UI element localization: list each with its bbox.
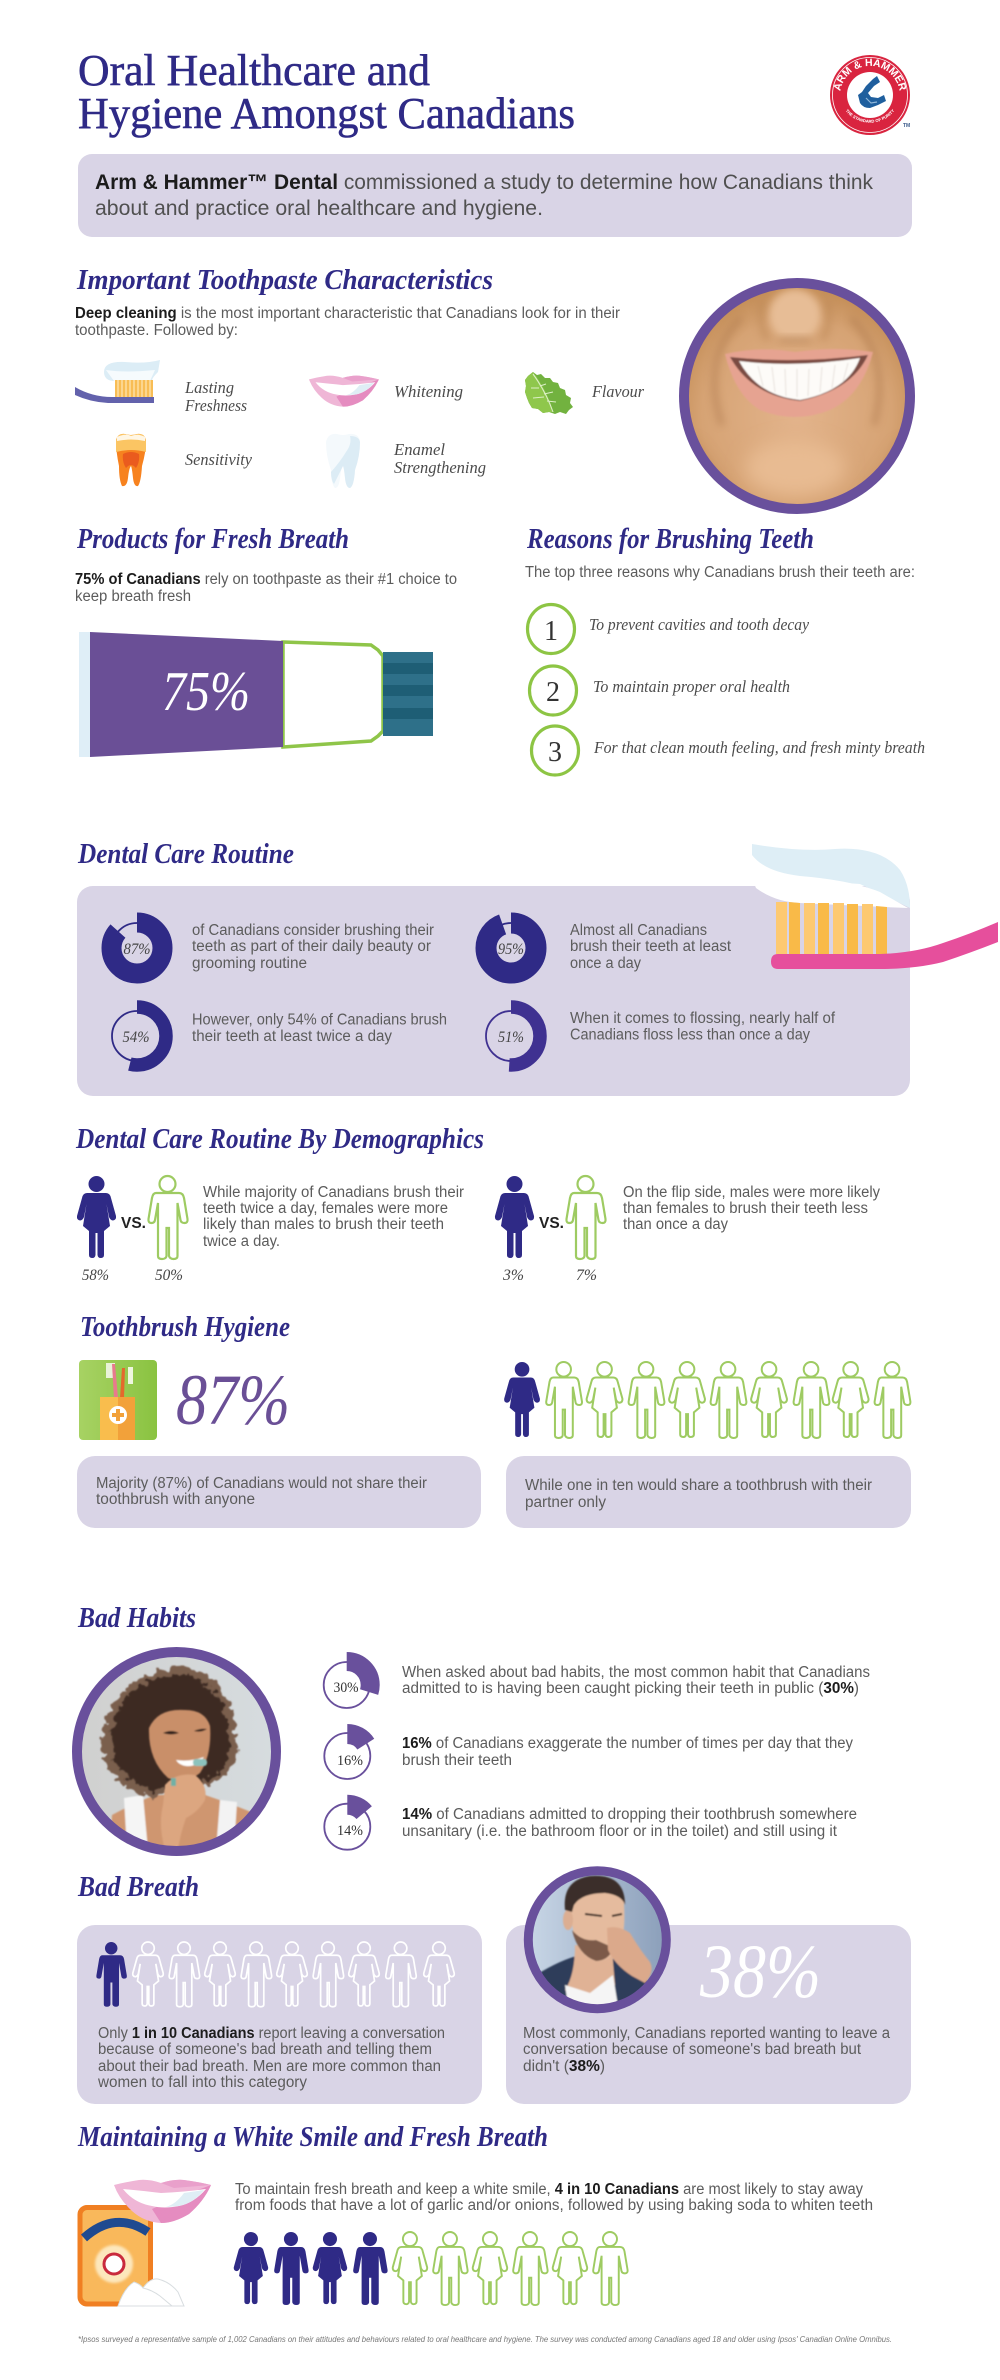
label: lasting freshness: Freshness [184,396,247,415]
text: 95%: once a day [570,955,641,972]
label: lasting freshness [184,378,247,415]
panel: would not share [77,1456,481,1528]
reason 2 [530,666,790,715]
panel: 38%: Most commonly, Canadians reported wanting to leave a [523,2025,890,2042]
panel: intro [78,154,912,237]
panel: would not share: toothbrush with anyone [96,1491,255,1508]
donut: 54%: 54% [122,1029,150,1046]
pie: 16% [324,1733,370,1779]
panel: 1 in 10 canadians [77,1925,482,2104]
panel: 38% [506,1925,911,2104]
label: flavour: Flavour [591,382,644,401]
pie: 30% [323,1662,370,1708]
donut: 51% [482,1007,540,1065]
pie: 16%: 16% [337,1753,363,1769]
text: garlic and baking soda: To maintain fresh breath and keep a white smile, 4 in 10 Canadians are most likely to stay away [235,2181,863,2198]
text: females brush more: likely than males to brush their teeth [203,1216,444,1233]
panel: would share with partner: While one in ten would share a toothbrush with their [525,1477,872,1494]
label: enamel strengthening: Enamel [393,440,445,459]
text: males flip side: On the flip side, males were more likely [623,1184,880,1201]
photo: smile [680,283,915,510]
icon: baking soda box with lips [80,2180,211,2306]
reason 3: 3 [548,737,562,768]
text: garlic and baking soda [235,2181,873,2214]
text: garlic and baking soda: from foods that have a lot of garlic and/or onions, followed by using baking soda to whiten teeth [235,2197,873,2214]
text block: 75% of canadians: keep breath fresh [75,588,191,605]
text: exaggerate [402,1735,853,1769]
text block: 75% of canadians: 75% of Canadians rely on toothpaste as their #1 choice to [75,571,457,588]
donut: 54% [108,1007,166,1065]
text: exaggerate: brush their teeth [402,1752,512,1769]
panel: 1 in 10 canadians: about their bad breath. Men are more common than [98,2058,441,2075]
text block: top three reasons: The top three reasons why Canadians brush their teeth are: [525,564,915,581]
logo: Arm & Hammer: ARM & HAMMER [834,58,906,91]
heading: toothbrush hygiene: Toothbrush Hygiene [80,1312,290,1343]
text: 51% [570,1010,836,1044]
panel: 1 in 10 canadians: women to fall into this category [97,2074,307,2091]
text: dropping toothbrush: unsanitary (i.e. the bathroom floor or in the toilet) and still using it [402,1823,838,1840]
reason 2: To maintain proper oral health [593,677,790,696]
section: bad habits [77,1603,870,1855]
donut: 87% [112,922,162,974]
photo: man holding nose [528,1871,666,2010]
title [78,46,575,138]
panel: intro: Arm & Hammer™ Dental commissioned a study to determine how Canadians think [95,171,873,194]
text: females brush more: twice a day. [203,1233,280,1250]
panel: dental care routine [77,886,910,1096]
reason 1: To prevent cavities and tooth decay [589,615,809,634]
comparison: 3% vs 7%: 3% [502,1267,524,1284]
section: reasons for brushing teeth [525,524,925,775]
panel: intro: about and practice oral healthcare and hygiene. [95,197,543,220]
text: 95%: Almost all Canadians [570,922,707,939]
text: exaggerate: 16% of Canadians exaggerate the number of times per day that they [402,1735,853,1752]
icon: pale tooth, enamel strengthening [326,434,360,488]
comparison: 3% vs 7% [495,1176,606,1284]
logo: Arm & Hammer [830,55,910,135]
reason 3 [532,726,925,775]
label: 75%: 75% [162,661,250,723]
heading: demographics: Dental Care Routine By Demographics [75,1124,484,1155]
label: sensitivity: Sensitivity [185,450,252,469]
icon: orange tooth, sensitivity [116,434,146,486]
section: maintaining a white smile [77,2122,873,2306]
text: 54%: However, only 54% of Canadians brush [192,1012,447,1028]
panel: 38%: didn't (38%) [523,2058,605,2075]
comparison: 58% vs 50%: VS. [121,1215,146,1232]
text: picking teeth: admitted to is having been caught picking their teeth in public (30%) [402,1680,859,1697]
panel: would share with partner [506,1456,911,1528]
text: dropping toothbrush [402,1806,857,1840]
footnote: *Ipsos surveyed a representative sample of 1,002 Canadians on their attitudes and behaviours related to oral healthcare and hygiene. The survey was conducted among Canadians aged 18 and older using Ipsos' Canadian Online Omnibus. [78,2334,892,2344]
icon: large toothbrush [752,844,998,969]
icon: toothpaste tube 75% [79,632,433,757]
panel: would not share: Majority (87%) of Canadians would not share their [96,1475,427,1492]
label: enamel strengthening: Strengthening [394,458,486,477]
donut: 95%: 95% [498,941,524,958]
text: males flip side [623,1184,880,1233]
label: whitening: Whitening [394,382,463,401]
comparison: 58% vs 50% [77,1176,188,1284]
text: males flip side: than once a day [623,1216,728,1233]
text block: deep cleaning: toothpaste. Followed by: [75,322,238,339]
heading: bad breath: Bad Breath [77,1872,199,1903]
photo: woman brushing teeth [77,1652,276,1855]
text: females brush more: While majority of Canadians brush their [203,1184,464,1201]
panel: 1 in 10 canadians: because of someone's bad breath and telling them [98,2041,432,2058]
section: dental care routine by demographics [75,1124,880,1284]
text: 87% [192,922,434,972]
panel: 1 in 10 canadians: Only 1 in 10 Canadians report leaving a conversation [98,2025,445,2042]
text: 95% [570,922,732,972]
pictogram: one in ten [504,1362,910,1438]
heading: products: Products for Fresh Breath [76,524,349,555]
title: Oral Healthcare and [78,46,430,95]
text block: deep cleaning [75,305,620,339]
text: females brush more: teeth twice a day, females were more [203,1200,448,1217]
stat: 87%: 87% [176,1360,290,1440]
section: toothbrush hygiene [77,1312,911,1528]
text: females brush more [203,1184,464,1250]
icon: toothbrush, lasting freshness [75,360,160,403]
section: products for fresh breath [75,524,457,757]
heading: reasons: Reasons for Brushing Teeth [526,524,814,555]
text block: 75% of canadians [75,571,457,605]
text: 51%: When it comes to flossing, nearly half of [570,1010,836,1027]
icon: lips, whitening [309,376,379,407]
text: picking teeth: When asked about bad habits, the most common habit that Canadians [402,1664,870,1681]
reason 1 [528,604,809,654]
logo: Arm & Hammer: THE STANDARD OF PURITY [846,108,894,123]
pie: 14% [324,1804,370,1850]
text: picking teeth [402,1664,870,1697]
text: 87%: grooming routine [192,955,307,972]
reason 1: 1 [544,616,558,647]
text: dropping toothbrush: 14% of Canadians admitted to dropping their toothbrush somewhere [402,1806,857,1823]
label: enamel strengthening [393,440,486,477]
section: important toothpaste characteristics [75,265,915,510]
donut: 95% [486,923,536,973]
panel: would share with partner: partner only [525,1494,606,1511]
heading: characteristics: Important Toothpaste Characteristics [76,265,493,296]
label: lasting freshness: Lasting [184,378,234,397]
donut: 51%: 51% [498,1029,524,1046]
text: 54% [192,1012,447,1045]
heading: bad habits: Bad Habits [77,1603,196,1634]
text: 51%: Canadians floss less than once a day [570,1026,810,1044]
comparison: 58% vs 50%: 58% [82,1267,109,1284]
pictogram: 4 in 10 [234,2232,628,2305]
text block: deep cleaning: Deep cleaning is the most important characteristic that Canadians look for in their [75,305,620,322]
icon: toothbrush cup [79,1360,157,1440]
text: 87%: teeth as part of their daily beauty or [192,938,431,955]
section: bad breath [77,1871,911,2104]
panel: 38%: 38% [699,1930,821,2014]
icon: mint leaf, flavour [525,372,573,414]
title: Hygiene Amongst Canadians [78,89,575,138]
comparison: 3% vs 7%: 7% [576,1267,597,1284]
text: 87%: of Canadians consider brushing their [192,922,434,939]
comparison: 58% vs 50%: 50% [155,1267,183,1284]
reason 3: For that clean mouth feeling, and fresh minty breath [593,738,925,757]
donut: 87%: 87% [124,941,150,958]
heading: dental care routine: Dental Care Routine [77,839,294,870]
reason 2: 2 [546,677,560,708]
pie: 14%: 14% [337,1823,363,1839]
text: males flip side: than females to brush their teeth less [623,1200,868,1217]
logo: Arm & Hammer: TM [903,123,910,129]
text: 54%: their teeth at least twice a day [192,1028,392,1045]
comparison: 3% vs 7%: VS. [539,1215,564,1232]
panel: 38%: conversation because of someone's bad breath but [523,2041,862,2058]
heading: maintaining: Maintaining a White Smile and Fresh Breath [77,2122,548,2153]
text: 95%: brush their teeth at least [570,938,732,955]
pie: 30%: 30% [334,1680,358,1696]
